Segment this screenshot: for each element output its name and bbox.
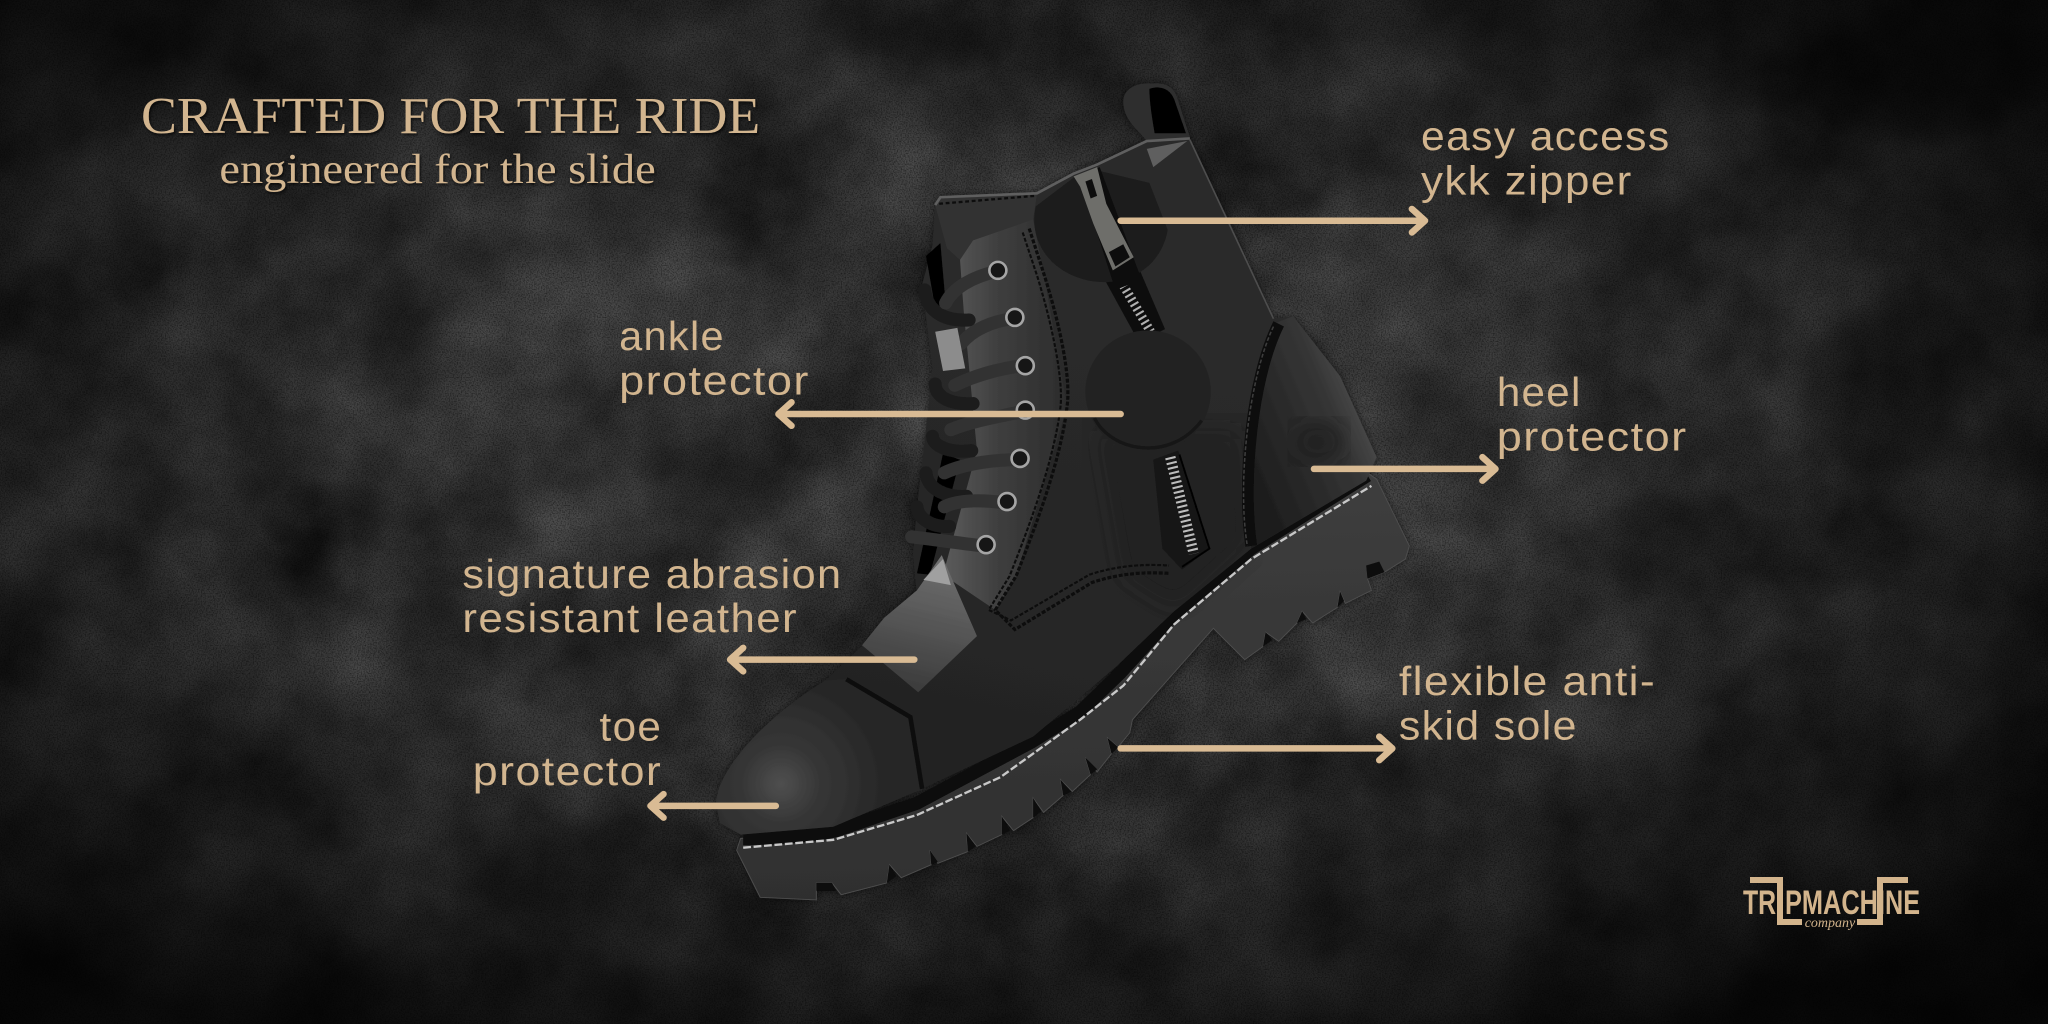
eyelets [978,262,1034,553]
shaft rim light [1190,140,1273,319]
upper ankle disc [1034,170,1168,282]
boot illustration [716,83,1409,900]
welt stitching [743,486,1371,848]
logo tagline: company [1805,916,1856,931]
laces [912,272,1023,546]
collar stitching [939,196,1034,204]
heading: CRAFTED FOR THE RIDE [141,88,760,145]
lower zipper [1153,451,1209,569]
welt band [743,475,1368,839]
heel counter seam [1248,324,1279,546]
abrasion patch [862,555,977,692]
arrow: ankle [778,402,1121,426]
collar rim [935,138,1190,205]
lower ankle disc [1085,330,1211,453]
sole [737,473,1409,900]
label: sole: skid sole [1399,702,1578,748]
label: ankle protector: protector [619,357,810,403]
lower shaft shade [1097,431,1247,607]
subheading: engineered for the slide [219,147,656,193]
heel stitching [1244,327,1273,546]
label: zipper: ykk zipper [1421,158,1633,204]
collar [935,193,1037,260]
logo wordmark: INE [1878,884,1920,922]
label: toe protector: protector [473,748,662,794]
label: heel protector: heel [1497,369,1582,415]
ankle seam stitching [995,229,1169,630]
sole notches [816,562,1384,891]
disc rim [1095,418,1202,448]
lace undercrossings [917,290,973,527]
label: abrasion leather: signature abrasion [462,551,842,597]
collar triangle [1147,141,1187,167]
arrow: sole [1121,737,1392,760]
arrow: abrasion [730,648,914,671]
label: abrasion leather: resistant leather [462,595,798,641]
logo wordmark: PMACH [1785,884,1878,922]
label: ankle protector: ankle [619,313,725,359]
zipper track [1079,167,1142,290]
heel counter [1246,316,1377,549]
lace keeper [935,328,965,371]
label: zipper: easy access [1421,113,1671,159]
arrow: toe [650,794,776,818]
logo [1743,880,1920,931]
toe cap [716,679,925,835]
lace crossings [912,272,1023,546]
arrow: heel [1314,457,1496,481]
arrow: zipper [1121,209,1425,232]
heel dark spot [1293,421,1345,462]
patch bright tip [923,559,951,585]
logo wordmark: TRI [1743,884,1783,922]
boot upper [716,138,1377,835]
upper zipper [1095,256,1165,342]
label: heel protector: protector [1497,414,1688,460]
label: sole: flexible anti- [1399,658,1656,704]
tongue slit [917,243,960,575]
pull tab [1123,83,1190,141]
toe seam [846,679,922,789]
ankle seam inner [989,232,1169,620]
label: toe protector: toe [600,704,662,750]
zipper pull [1074,167,1134,270]
logo pipes [1750,880,1908,922]
lace panel [943,219,1067,610]
title [141,88,760,193]
